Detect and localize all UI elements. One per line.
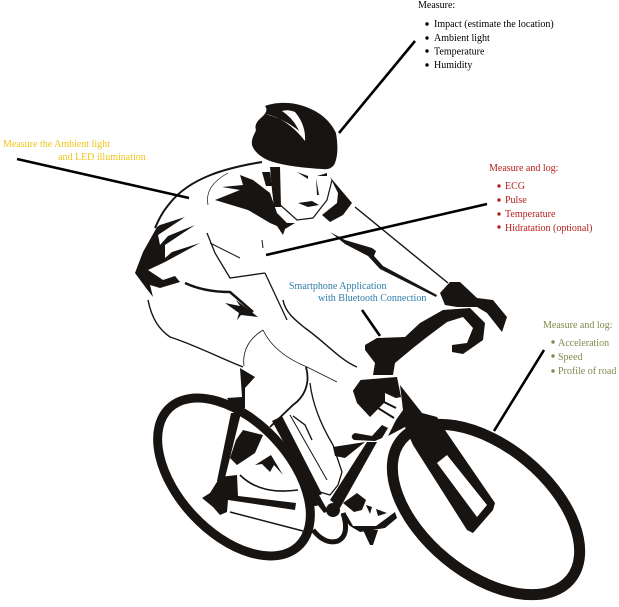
text block: ambient light	[3, 139, 146, 163]
rear shoe	[230, 430, 298, 491]
text block: body measurements: Hidratation (optional)	[505, 223, 592, 234]
lower hand glove	[345, 377, 402, 420]
text block: bike measurements: Profile of road	[558, 366, 616, 377]
text block: smartphone application: Smartphone Application	[289, 281, 386, 292]
text block: ambient light: Measure the Ambient light	[3, 139, 110, 150]
text block: body measurements: Temperature	[505, 209, 556, 220]
jersey lines	[185, 173, 287, 320]
pointer: helmet	[339, 41, 415, 133]
back outline	[155, 162, 262, 228]
frame tubes	[217, 413, 377, 513]
front shoe	[343, 493, 397, 545]
illustration: cyclist on bicycle	[129, 103, 611, 607]
text block: smartphone application: with Bluetooth Connection	[318, 293, 426, 304]
text block: helmet measurements: Humidity	[434, 60, 472, 71]
brake lever	[352, 425, 388, 441]
helmet	[252, 103, 337, 169]
rear jersey shadow	[135, 217, 200, 297]
handlebar	[365, 308, 485, 375]
pointer: ambient light	[17, 159, 189, 198]
head and face	[262, 167, 352, 222]
text block: smartphone application	[289, 281, 426, 304]
text block: ambient light: and LED illumination	[58, 152, 146, 163]
pointer: smartphone	[362, 310, 380, 336]
leg outlines	[148, 300, 357, 495]
text block: helmet measurements	[418, 0, 554, 71]
pointer: jersey sensors	[266, 204, 487, 255]
text block: body measurements: Measure and log:	[489, 163, 558, 174]
upper hand glove	[440, 282, 507, 332]
text block: body measurements	[489, 163, 592, 234]
fork and head tube	[388, 385, 495, 533]
pointer: wheel sensors	[494, 350, 544, 431]
jersey shadow at neck	[215, 175, 295, 235]
text block: bike measurements	[543, 320, 616, 377]
chain	[228, 495, 303, 531]
front wheel	[361, 391, 611, 607]
text block: helmet measurements: Ambient light	[434, 33, 490, 44]
text block: bike measurements: Acceleration	[558, 338, 609, 349]
text block: bike measurements: Measure and log:	[543, 320, 612, 331]
text block: helmet measurements: Temperature	[434, 46, 485, 58]
rear derailleur	[202, 475, 238, 515]
text block: helmet measurements: Measure:	[418, 0, 455, 11]
rear wheel	[129, 370, 339, 584]
crank and chainring	[309, 494, 346, 542]
right arm	[330, 207, 448, 297]
text block: helmet measurements: Impact (estimate the location)	[434, 19, 554, 30]
text block: body measurements: Pulse	[505, 195, 527, 206]
text block: bike measurements: Speed	[558, 352, 582, 363]
shorts wedge	[225, 300, 258, 320]
shorts cuff	[227, 368, 255, 412]
text block: body measurements: ECG	[505, 181, 525, 192]
